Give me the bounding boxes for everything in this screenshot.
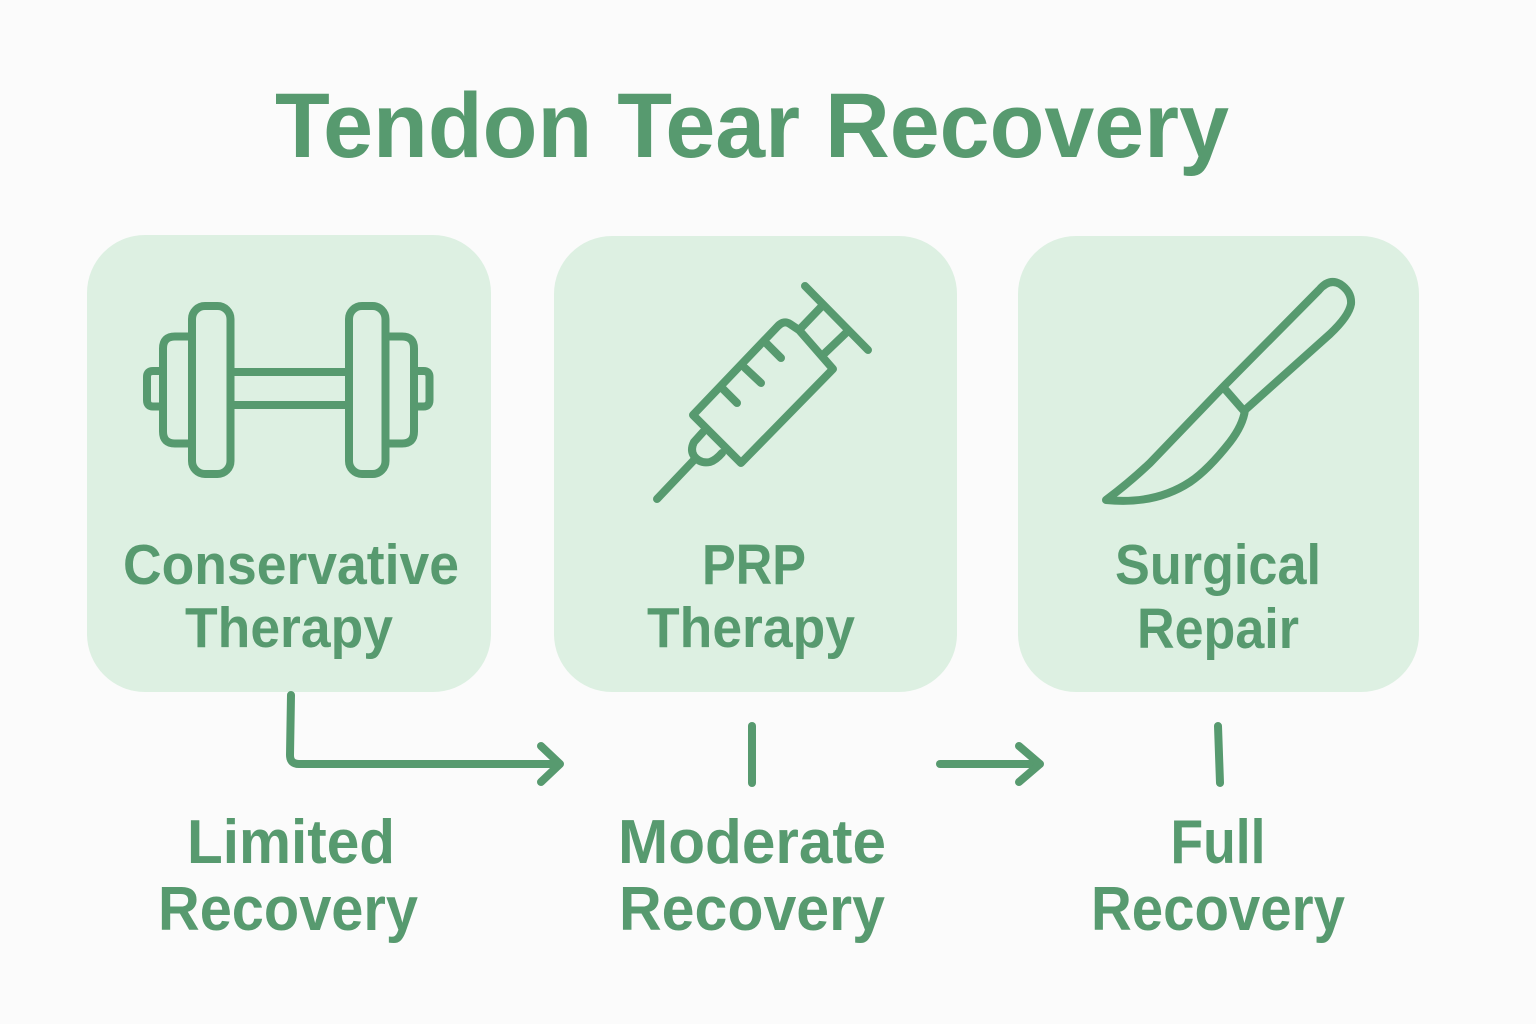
icon: scalpel <box>1106 282 1351 501</box>
panel: PRP therapy <box>554 236 957 692</box>
outcome: full recovery: Recovery <box>1091 875 1345 944</box>
title: Tendon Tear Recovery <box>275 75 1229 177</box>
arrow: moderate to full <box>940 746 1040 782</box>
icon: dumbbell <box>147 306 430 474</box>
label: PRP therapy: PRP <box>702 533 806 597</box>
outcome: moderate recovery: Recovery <box>619 875 885 944</box>
outcome: full recovery: Full <box>1170 808 1266 877</box>
label: surgical repair: Surgical <box>1115 533 1321 597</box>
panel: surgical repair <box>1018 236 1419 692</box>
label: surgical repair: Repair <box>1137 597 1299 661</box>
arrow: conservative to moderate <box>290 695 560 782</box>
label: PRP therapy: Therapy <box>647 596 855 660</box>
label: conservative therapy: Therapy <box>185 596 393 660</box>
outcome: moderate recovery: Moderate <box>618 808 886 877</box>
icon: syringe <box>657 286 868 499</box>
connector: full recovery <box>1218 726 1220 783</box>
label: conservative therapy: Conservative <box>123 533 459 597</box>
outcome: limited recovery: Limited <box>187 808 395 877</box>
connector: moderate recovery <box>748 726 756 783</box>
panel: conservative therapy <box>87 235 491 692</box>
outcome: limited recovery: Recovery <box>158 875 418 944</box>
